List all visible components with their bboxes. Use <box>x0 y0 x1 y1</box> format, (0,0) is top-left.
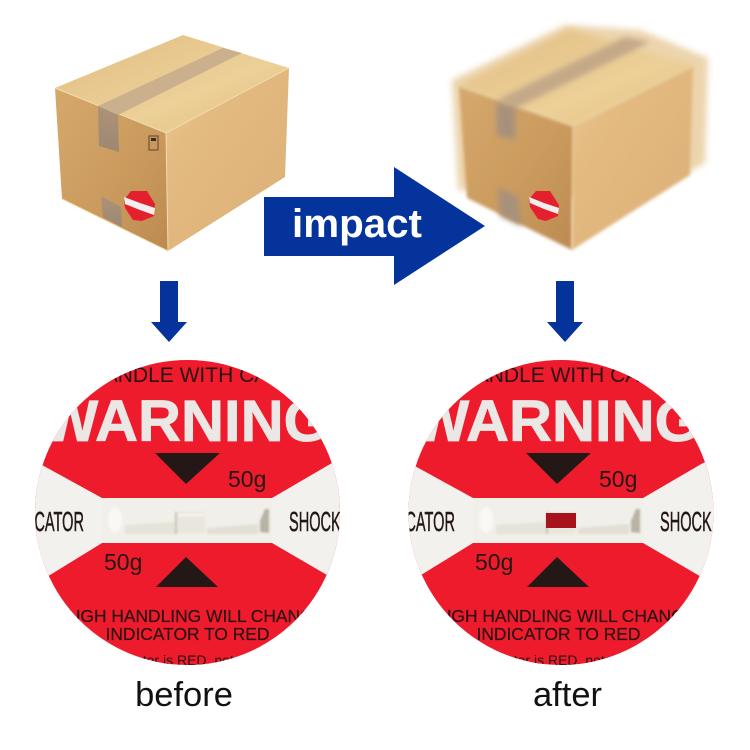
tape across the top <box>98 48 242 115</box>
left white band <box>408 466 473 574</box>
lower 50g: 50g <box>475 549 513 575</box>
lower 50g: 50g <box>104 549 142 575</box>
indicator to red text: INDICATOR TO RED <box>106 624 269 644</box>
left white band <box>35 465 102 576</box>
warning heading: WARNING <box>413 389 701 454</box>
big arrow with impact label <box>264 167 485 285</box>
before caption: before <box>135 676 233 714</box>
ghost box <box>452 25 708 200</box>
small print: If indicator is RED, note on <box>466 652 632 668</box>
shock sticker on box <box>529 191 559 221</box>
circular close-up: indicator before <box>35 360 340 665</box>
rough handling text: ROUGH HANDLING WILL CHANGE <box>42 606 325 626</box>
after caption: after <box>533 676 602 714</box>
lower triangle <box>156 557 218 587</box>
box top face <box>458 29 696 127</box>
down arrow left <box>151 281 187 342</box>
top label text: HANDLE WITH CARE <box>460 364 668 387</box>
upper triangle <box>155 453 220 484</box>
top label text: HANDLE WITH CARE <box>89 364 297 387</box>
rough handling text: ROUGH HANDLING WILL CHANGE <box>413 606 696 626</box>
box front face <box>55 88 168 251</box>
package box after impact, motion blurred <box>452 25 708 250</box>
small print: If indicator is RED, note on <box>94 652 261 668</box>
arrow shape <box>264 167 485 285</box>
box side face <box>166 68 289 251</box>
upper 50g: 50g <box>228 466 266 492</box>
lower triangle <box>527 557 589 587</box>
shock sticker on box <box>124 191 155 221</box>
impact text: impact <box>292 202 422 246</box>
lower front tape <box>101 196 122 227</box>
indicator word: INDICATOR <box>5 506 84 537</box>
circular close-up: indicator after <box>408 360 714 665</box>
box top face <box>55 35 289 133</box>
right white band <box>643 462 714 576</box>
indicator slot with red window <box>473 498 643 543</box>
box side face <box>572 67 693 250</box>
shock word: SHOCK <box>289 506 341 537</box>
indicator to red text: INDICATOR TO RED <box>477 624 640 644</box>
upper 50g: 50g <box>599 466 637 492</box>
upper triangle <box>526 453 591 484</box>
red label background <box>400 355 720 675</box>
indicator word: INDICATOR <box>376 506 455 537</box>
indicator slot <box>102 498 272 543</box>
shock word: SHOCK <box>660 506 712 537</box>
warning heading: WARNING <box>42 389 330 454</box>
down arrow right <box>547 281 583 342</box>
red label background <box>30 355 350 675</box>
box front face <box>459 87 573 250</box>
box edge highlights <box>55 68 289 251</box>
blurred tape <box>496 37 650 226</box>
right white band <box>272 463 340 575</box>
package box before impact <box>55 35 289 251</box>
upper front tape <box>98 106 119 152</box>
handling icon <box>149 136 158 150</box>
